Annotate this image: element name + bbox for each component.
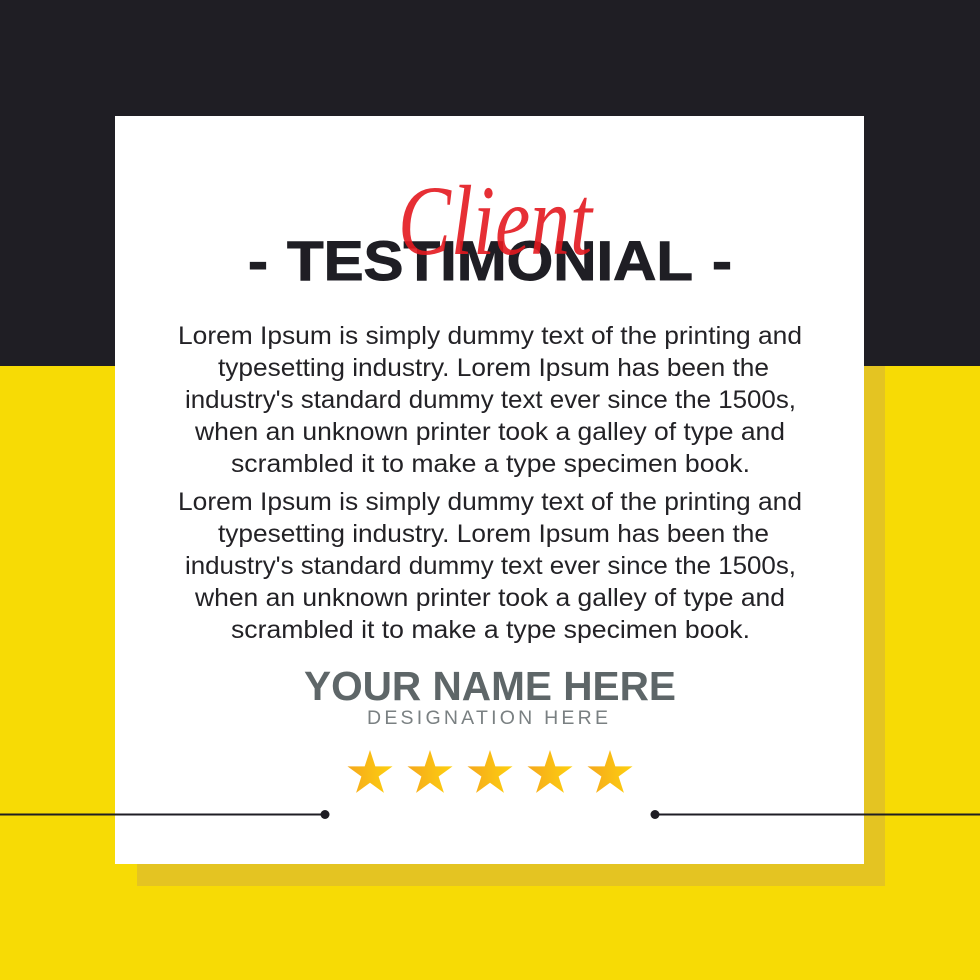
- text block: first paragraph: typesetting industry. Lorem Ipsum has been the: [218, 354, 769, 382]
- five star rating: [347, 750, 633, 793]
- heading: script word client: Client: [398, 165, 594, 276]
- text block: first paragraph: [178, 322, 802, 478]
- text block: first paragraph: when an unknown printer took a galley of type and: [194, 418, 785, 446]
- heading: testimonial: -: [712, 229, 732, 292]
- heading: testimonial: -: [248, 229, 268, 292]
- panel: white testimonial card: [115, 116, 864, 864]
- card drop shadow: [137, 366, 885, 886]
- text block: second paragraph: typesetting industry. Lorem Ipsum has been the: [218, 520, 769, 548]
- text block: second paragraph: industry's standard dummy text ever since the 1500s,: [185, 552, 796, 580]
- text block: first paragraph: industry's standard dummy text ever since the 1500s,: [185, 386, 796, 414]
- text block: second paragraph: when an unknown printer took a galley of type and: [194, 584, 785, 612]
- client name: YOUR NAME HERE: [304, 663, 676, 709]
- left connector line with dot: [0, 810, 330, 819]
- text block: second paragraph: [178, 488, 802, 644]
- dark top background band: [0, 0, 980, 366]
- yellow bottom background band: [0, 366, 980, 980]
- text block: first paragraph: Lorem Ipsum is simply dummy text of the printing and: [178, 322, 802, 350]
- text block: second paragraph: scrambled it to make a type specimen book.: [231, 616, 750, 644]
- text block: second paragraph: Lorem Ipsum is simply dummy text of the printing and: [178, 488, 802, 516]
- text block: first paragraph: scrambled it to make a type specimen book.: [231, 450, 750, 478]
- heading: testimonial: TESTIMONIAL: [287, 229, 693, 292]
- right connector line with dot: [650, 810, 980, 819]
- client designation: DESIGNATION HERE: [367, 707, 608, 729]
